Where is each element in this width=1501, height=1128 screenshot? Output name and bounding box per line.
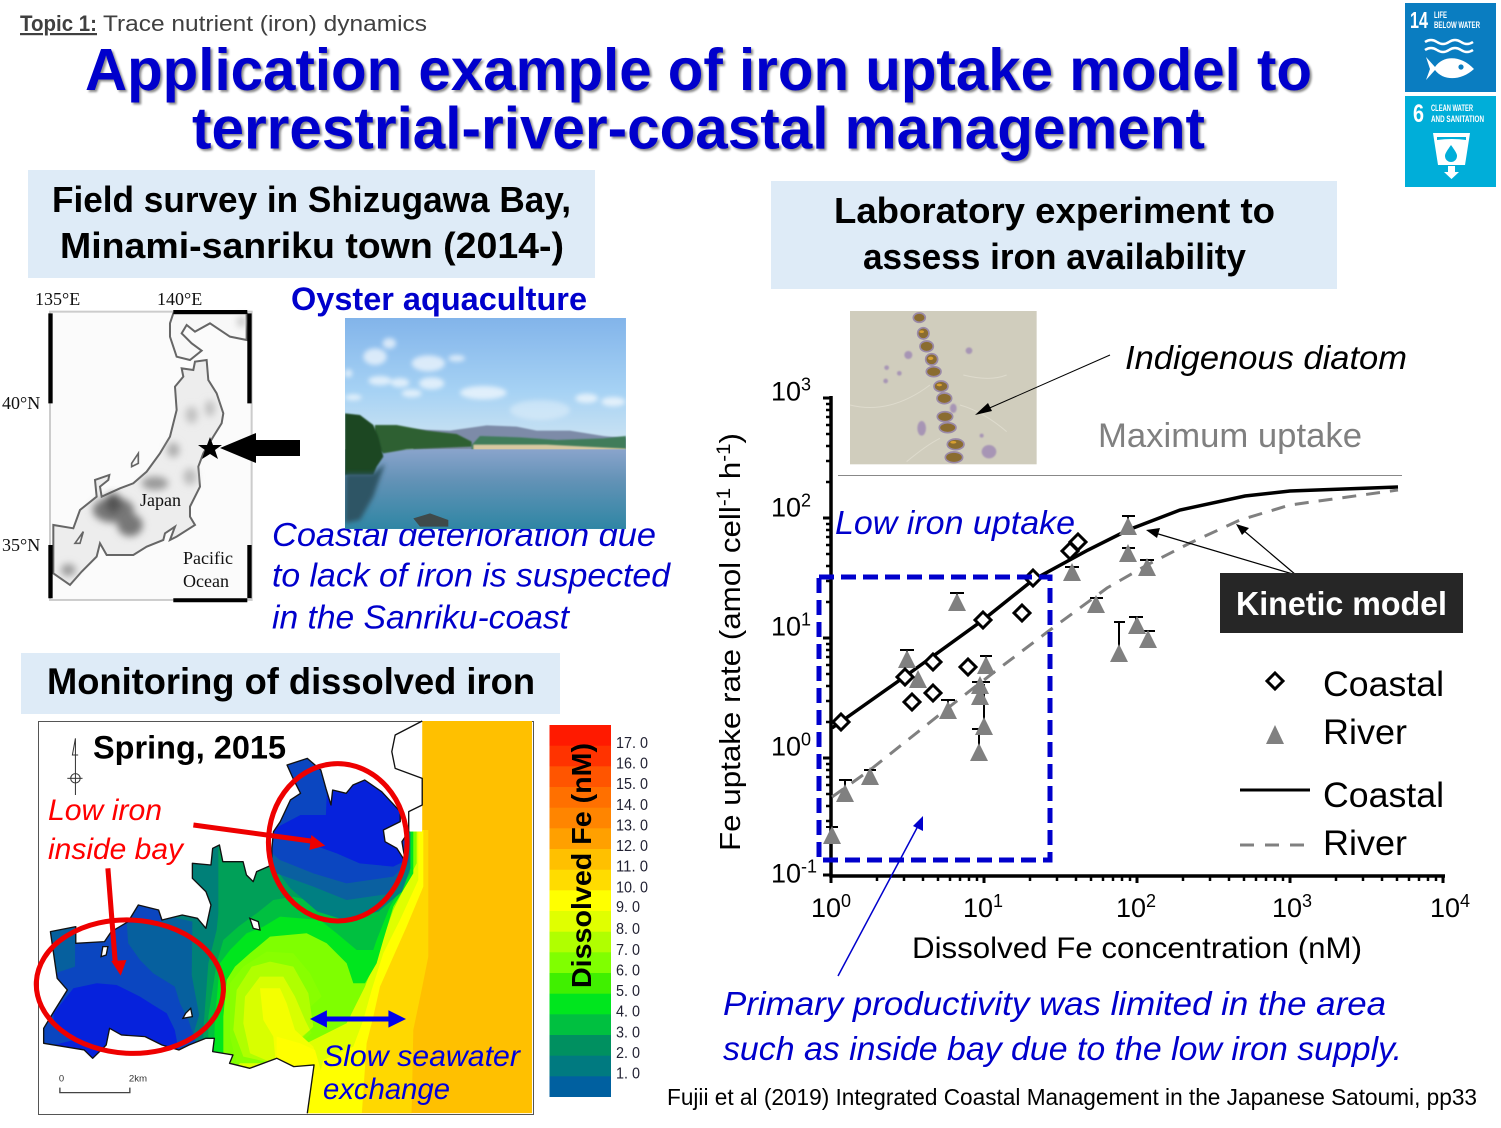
colour bar legend: Dissolved Fe (nM) — [566, 743, 597, 988]
heading: monitoring: Monitoring of dissolved iron — [47, 661, 535, 702]
axis tick labels: -1 — [801, 856, 817, 876]
map of Japan: 40°N — [2, 393, 40, 413]
data: river triangles — [823, 517, 1157, 844]
colour bar legend: 10. 0 — [616, 880, 648, 896]
label: low iron inside bay — [48, 794, 185, 866]
map of Japan: Ocean — [183, 571, 229, 591]
y axis title: h — [715, 462, 747, 488]
y axis title: Fe uptake rate (amol cell — [715, 532, 747, 851]
error bars — [826, 516, 1155, 827]
colour bar legend: 6. 0 — [616, 962, 640, 980]
axis tick labels: 10 — [771, 732, 801, 762]
axis tick labels: 10 — [771, 612, 801, 642]
colour bar legend: 9. 0 — [616, 899, 640, 916]
scale bar — [59, 1073, 147, 1093]
legend: River — [1323, 713, 1407, 752]
colour bar legend: 3. 0 — [616, 1024, 640, 1042]
label: maximum uptake: Maximum uptake — [1098, 417, 1362, 455]
coastline — [44, 721, 422, 1113]
heading: laboratory experiment: Laboratory experiment to — [834, 190, 1275, 231]
colour bar legend: 4. 0 — [616, 1004, 640, 1020]
heading: field survey: Field survey in Shizugawa Bay, — [52, 179, 571, 220]
citation: Fujii et al (2019) Integrated Coastal Management in the Japanese Satoumi, pp33 — [667, 1084, 1477, 1110]
arrows from kinetic model — [1146, 524, 1296, 575]
conclusion text — [723, 985, 1402, 1067]
label: slow seawater exchange: exchange — [323, 1073, 450, 1106]
label: kinetic model: Kinetic model — [1236, 585, 1447, 622]
topic line: Trace nutrient (iron) dynamics — [103, 11, 427, 36]
axis tick labels: 2 — [1146, 891, 1156, 911]
y axis title: -1 — [714, 443, 735, 462]
axis tick labels: 10 — [771, 492, 801, 522]
title — [85, 37, 1312, 162]
scale bar: 2km — [129, 1073, 147, 1084]
plume and coastal gradient bands — [174, 830, 428, 1114]
label: low iron inside bay: inside bay — [48, 833, 185, 866]
colour bar legend: 7. 0 — [616, 942, 640, 959]
axis tick labels: 0 — [801, 730, 811, 750]
icon: SDG 14 life below water — [1405, 3, 1496, 92]
colour bar legend: 2. 0 — [616, 1045, 640, 1062]
axis tick labels: 1 — [801, 610, 811, 630]
axis tick labels: 1 — [993, 891, 1003, 911]
axis tick labels: 10 — [811, 893, 841, 923]
conclusion text: such as inside bay due to the low iron supply. — [723, 1030, 1402, 1067]
islands — [101, 918, 260, 1018]
arrow: to Shizugawa Bay — [220, 433, 300, 463]
legend: Coastal — [1323, 776, 1444, 815]
red ellipses — [33, 764, 407, 1058]
photo: oyster bay — [344, 318, 626, 529]
heading: oyster aquaculture: Oyster aquaculture — [291, 281, 587, 317]
text: coastal deterioration — [272, 516, 672, 636]
map: dissolved iron distribution — [20, 721, 534, 1117]
axis tick labels: 10 — [771, 858, 801, 888]
icon: north arrow — [67, 738, 83, 795]
heading: field survey — [28, 170, 595, 278]
axis tick labels: 3 — [1302, 891, 1312, 911]
y axis title: ) — [715, 433, 747, 443]
colour bar legend: 14. 0 — [616, 797, 648, 814]
y axis title: -1 — [714, 488, 735, 506]
title: Application example of iron uptake model to — [85, 37, 1312, 103]
text: coastal deterioration: Coastal deterioration due — [272, 516, 656, 553]
chart axes — [823, 396, 1445, 883]
model curve: river — [832, 490, 1398, 797]
label: slow seawater exchange: Slow seawater — [323, 1040, 521, 1073]
map of Japan — [2, 289, 252, 602]
red arrow to north bay — [193, 825, 325, 850]
colour bar legend: 17. 0 — [616, 735, 648, 752]
map of Japan: 35°N — [2, 535, 40, 555]
title: terrestrial-river-coastal management — [192, 96, 1205, 162]
axis tick labels: 10 — [1272, 893, 1302, 923]
heading: laboratory experiment — [771, 181, 1337, 289]
axis tick labels: 0 — [841, 891, 851, 911]
label: spring 2015: Spring, 2015 — [93, 730, 286, 766]
label: kinetic model — [1220, 573, 1463, 633]
colour bar legend: 12. 0 — [616, 838, 648, 855]
text: coastal deterioration: in the Sanriku-coast — [272, 598, 571, 636]
icon: SDG 14 life below water: 14 — [1410, 7, 1428, 33]
x axis title: Dissolved Fe concentration (nM) — [912, 932, 1362, 965]
map of Japan: 140°E — [157, 289, 202, 309]
chart: Fe uptake rate — [714, 374, 1470, 965]
red arrow to west bay — [108, 868, 126, 976]
map of Japan: Japan — [140, 490, 181, 510]
label: slow seawater exchange — [323, 1040, 521, 1106]
axis tick labels: 3 — [801, 374, 811, 394]
icon: SDG 6 clean water — [1405, 96, 1496, 187]
label: low iron uptake: Low iron uptake — [835, 504, 1075, 541]
text: coastal deterioration: to lack of iron is suspected — [272, 556, 672, 594]
map of Japan: 135°E — [35, 289, 80, 309]
dashed box: low iron region — [819, 577, 1050, 860]
conclusion text: Primary productivity was limited in the area — [723, 985, 1386, 1022]
axis tick labels: 4 — [1460, 891, 1470, 911]
blue arrow to box — [838, 816, 923, 976]
legend: Coastal — [1323, 665, 1444, 704]
axis tick labels — [771, 374, 1470, 923]
legend: River — [1323, 824, 1407, 863]
photo: indigenous diatom — [850, 311, 1037, 464]
icon: SDG 6 clean water: CLEAN WATER — [1431, 103, 1473, 113]
colour bar legend: 15. 0 — [616, 776, 648, 793]
heading: monitoring — [21, 653, 560, 714]
label: low iron inside bay: Low iron — [48, 794, 162, 827]
heading: laboratory experiment: assess iron availability — [863, 236, 1246, 277]
model curve: coastal — [832, 487, 1398, 728]
icon: SDG 6 clean water: 6 — [1413, 100, 1424, 128]
axis tick labels: 2 — [801, 490, 811, 510]
axis tick labels: 10 — [771, 376, 801, 406]
colour bar legend — [550, 725, 648, 1097]
icon: star marking site — [198, 437, 222, 459]
axis tick labels: 10 — [1116, 893, 1146, 923]
colour bar legend: 16. 0 — [616, 756, 648, 772]
colour bar legend: 11. 0 — [616, 858, 648, 876]
icon: SDG 14 life below water: BELOW WATER — [1434, 20, 1480, 30]
colour bar legend: 13. 0 — [616, 818, 648, 834]
icon: SDG 14 life below water: LIFE — [1434, 10, 1447, 20]
axis tick labels: 10 — [963, 893, 993, 923]
map of Japan: Pacific — [183, 548, 233, 568]
topic line: Topic 1: — [20, 11, 97, 36]
legend — [1240, 665, 1444, 863]
colour bar legend: 1. 0 — [616, 1066, 640, 1082]
heading: field survey: Minami-sanriku town (2014-) — [60, 225, 564, 266]
blue double arrow — [310, 1010, 406, 1028]
scale bar: 0 — [59, 1073, 64, 1084]
label: indigenous diatom: Indigenous diatom — [1125, 339, 1407, 376]
colour bar legend: 8. 0 — [616, 921, 640, 938]
axis tick labels: 10 — [1430, 893, 1460, 923]
colour bar legend: 5. 0 — [616, 983, 640, 1000]
data: coastal diamonds — [833, 534, 1086, 730]
arrow: to diatom — [975, 355, 1110, 415]
